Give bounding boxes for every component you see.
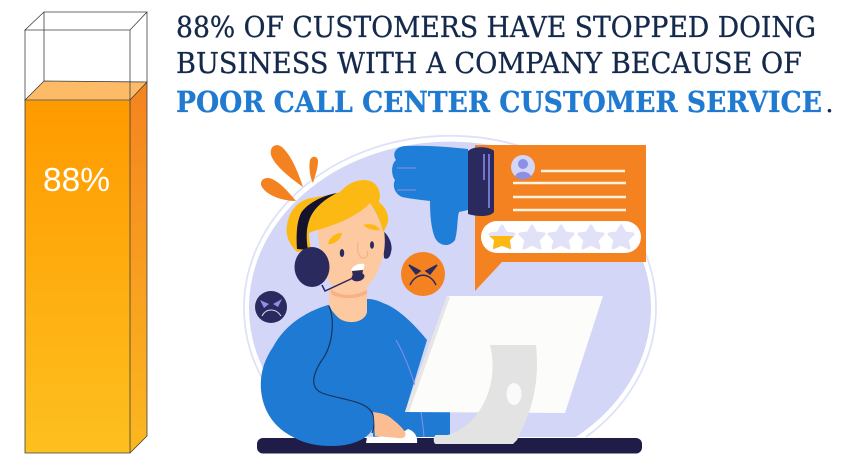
monitor stand [434,345,537,444]
headband [297,193,337,250]
headline [176,11,834,119]
agent head [286,180,392,298]
icon: thumbs down [392,146,494,245]
star rating [481,221,641,253]
hair [286,180,388,252]
monitor [405,296,603,444]
eyebrows [328,224,380,244]
near ear cup [294,247,330,287]
desk [257,438,642,454]
bar value: 88% [43,162,110,199]
3D bar chart: 88% [25,12,147,453]
chin shadow [331,289,367,298]
agent body [261,283,450,446]
mouth [351,264,364,271]
neck [329,283,367,322]
mouse [366,429,417,443]
headset cable [314,306,374,433]
review text lines [513,171,626,210]
illustration: stressed call center agent [244,136,656,454]
icon: angry orange face [401,252,445,296]
headline: . [825,86,834,119]
headline: 88% OF CUSTOMERS HAVE STOPPED DOING [176,11,816,44]
nose [358,242,368,258]
background blob [244,136,656,437]
panel: review speech bubble [475,145,646,291]
eyes [340,249,344,257]
hand [373,412,406,438]
icon: angry dark face [255,291,287,323]
icon: reviewer avatar [511,155,535,179]
bar liquid top [25,81,147,100]
headline: POOR CALL CENTER CUSTOMER SERVICE [176,85,822,119]
bar right side [130,82,147,453]
bar outline [25,12,147,453]
icon: alarm sparks [261,145,318,201]
microphone [322,278,353,291]
far ear cup [382,230,392,259]
bar front [25,100,130,453]
face [317,203,385,294]
headline: BUSINESS WITH A COMPANY BECAUSE OF [176,47,802,80]
